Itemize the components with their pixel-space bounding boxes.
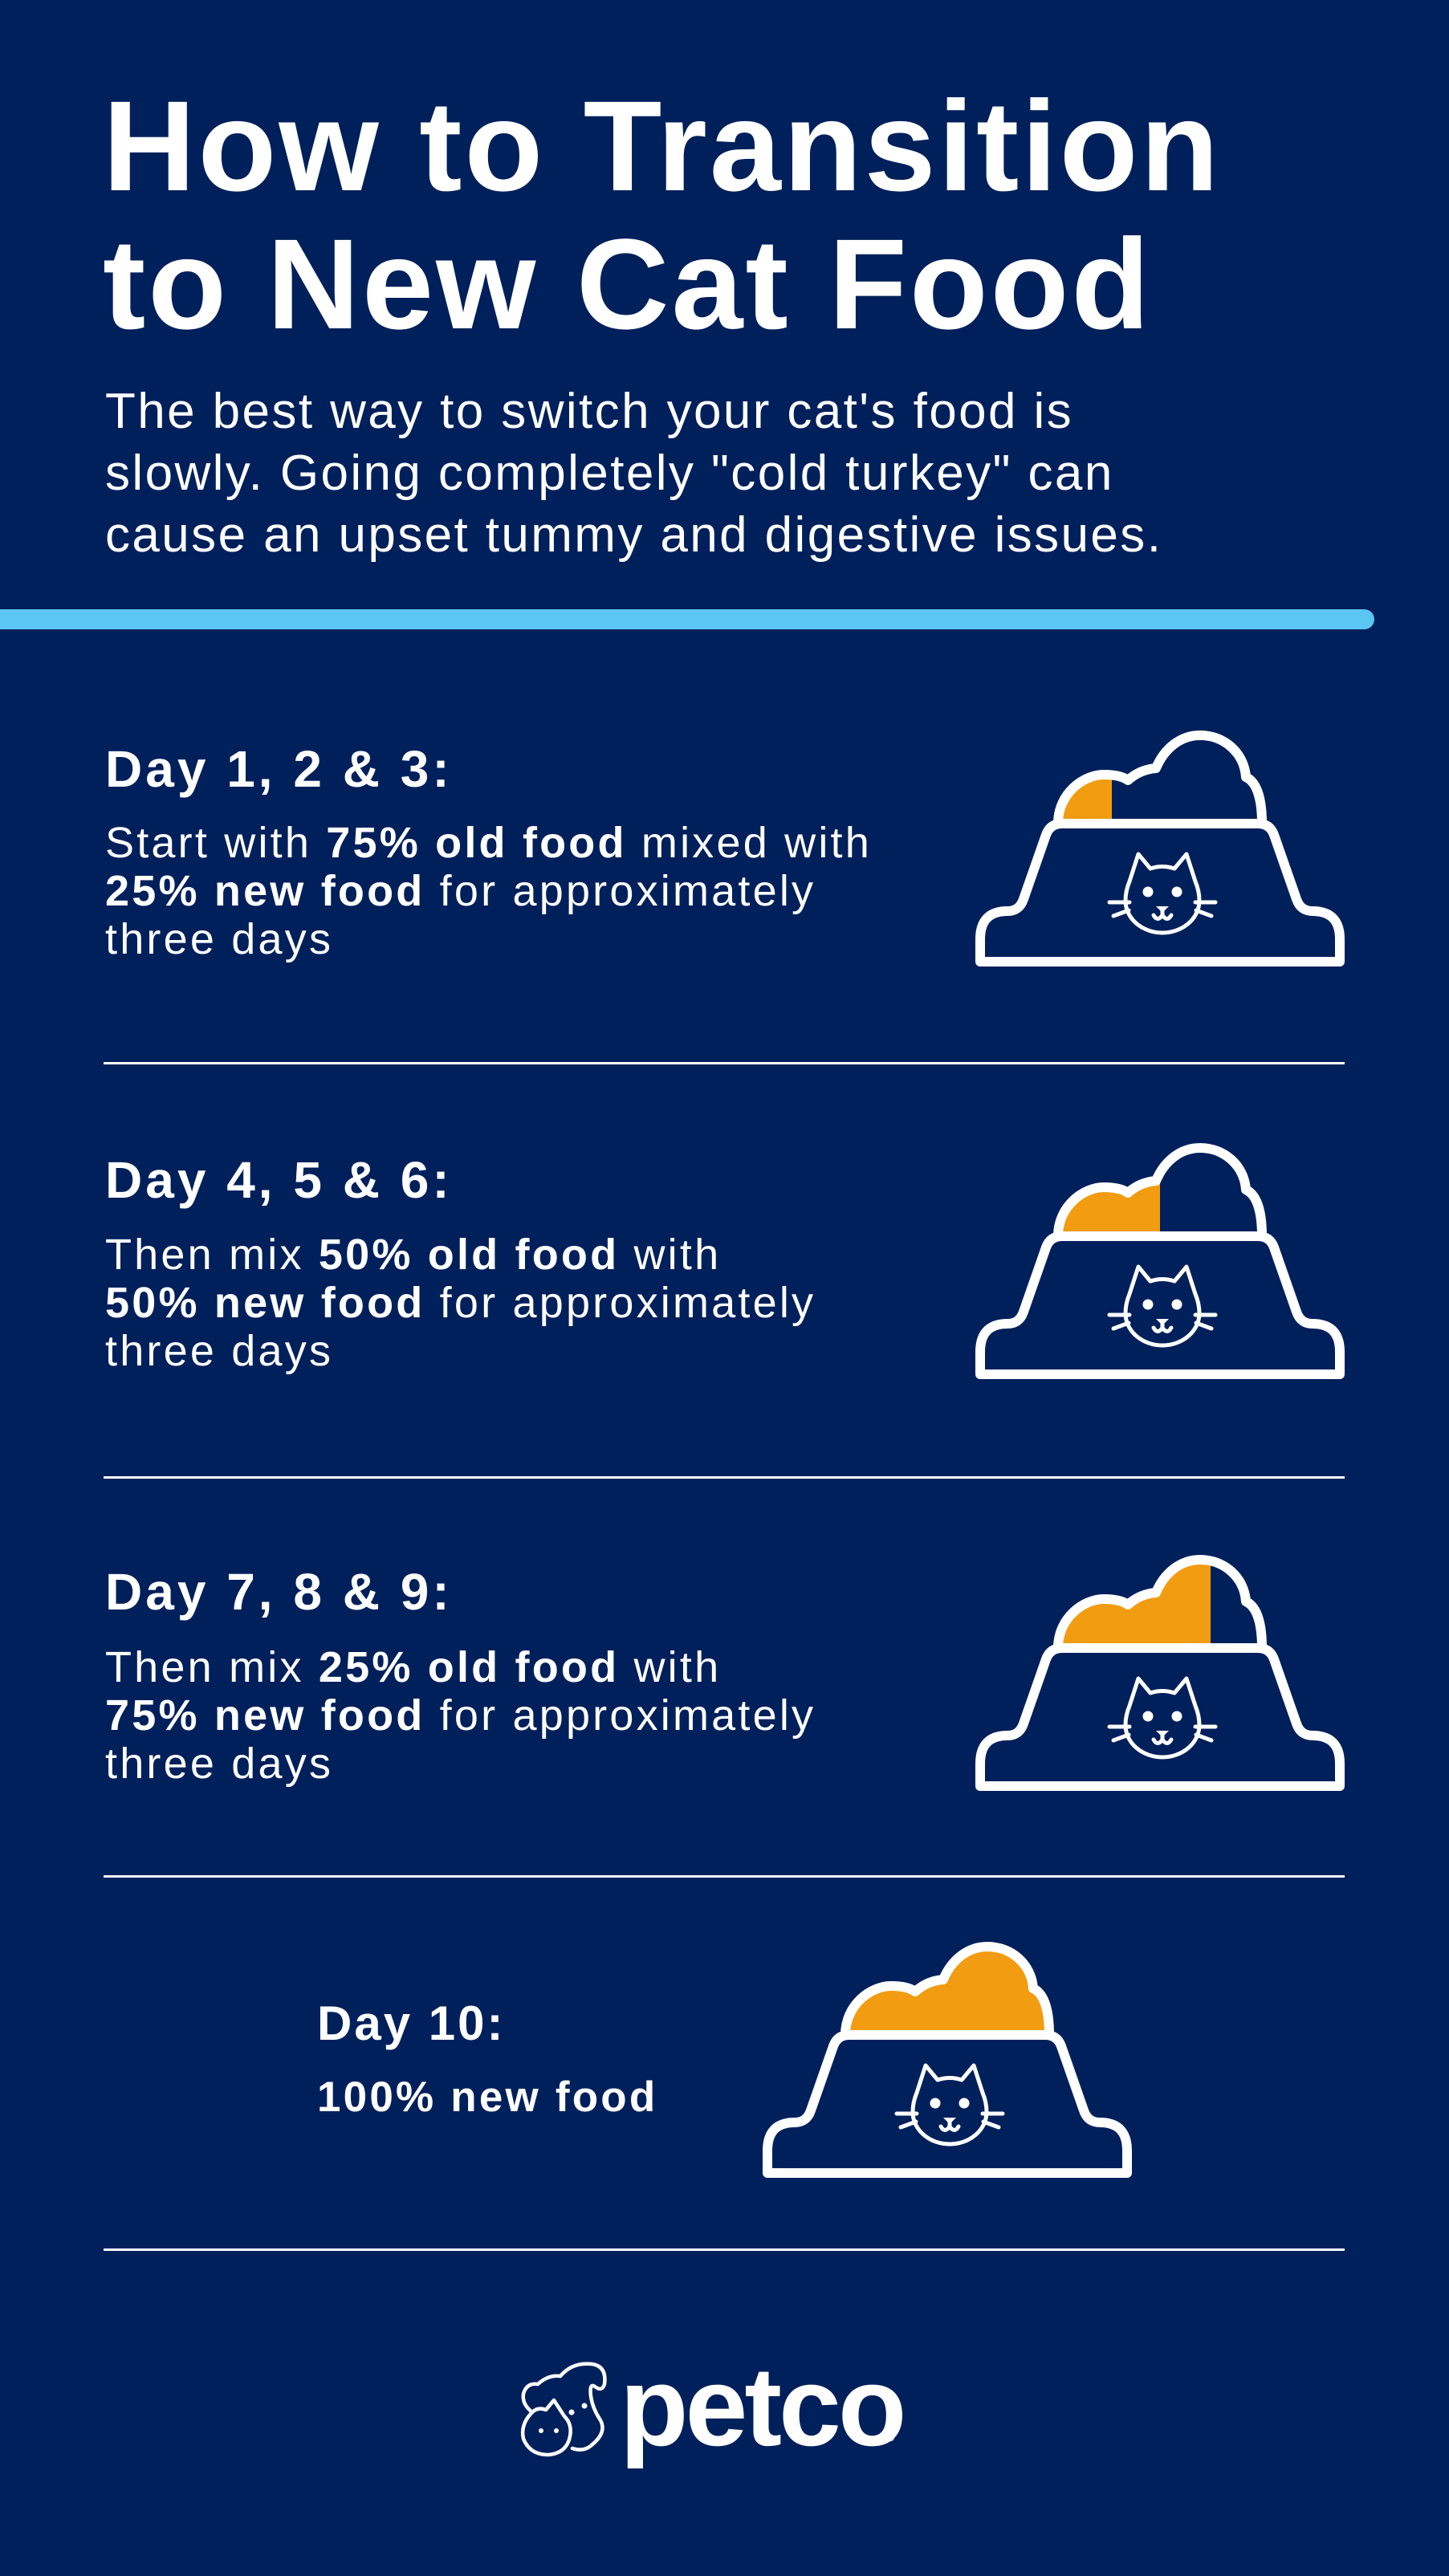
icon: cat and dog — [520, 2362, 607, 2456]
step 3 text: Then mix 25% old food with — [105, 1643, 721, 1691]
icon: bowl 50% — [975, 1143, 1345, 1379]
icon: bowl 75% — [975, 1555, 1345, 1791]
step 2 text: Then mix 50% old food with — [105, 1231, 721, 1279]
step 1 text: three days — [105, 915, 333, 963]
icon: bowl 25% — [975, 730, 1345, 967]
accent bar — [0, 609, 1374, 629]
subtitle — [105, 384, 1162, 563]
title: How to Transition — [103, 74, 1221, 218]
logo: ® — [886, 2431, 894, 2444]
step 1 text: 25% new food for approximately — [105, 867, 816, 915]
step 4 heading: Day 10: — [317, 1996, 505, 2050]
brand name: petco — [620, 2343, 903, 2469]
title — [103, 74, 1221, 356]
step 2 heading: Day 4, 5 & 6: — [105, 1151, 453, 1209]
step 2 text: 50% new food for approximately — [105, 1279, 816, 1327]
logo — [520, 2343, 903, 2469]
step 3 heading: Day 7, 8 & 9: — [105, 1563, 453, 1621]
step 1 text — [105, 819, 872, 963]
step 3 text: three days — [105, 1740, 333, 1788]
step 1 text: Start with 75% old food mixed with — [105, 819, 872, 867]
step 4 text: 100% new food — [317, 2073, 657, 2121]
subtitle: The best way to switch your cat's food is — [105, 384, 1073, 439]
step 2 text: three days — [105, 1327, 333, 1375]
subtitle: cause an upset tummy and digestive issues. — [105, 507, 1162, 563]
step 3 text — [105, 1643, 816, 1788]
title: to New Cat Food — [103, 212, 1152, 356]
step 1 heading: Day 1, 2 & 3: — [105, 740, 453, 798]
subtitle: slowly. Going completely "cold turkey" can — [105, 446, 1114, 501]
icon: bowl 100% — [763, 1942, 1132, 2178]
step 2 text — [105, 1231, 816, 1375]
step 3 text: 75% new food for approximately — [105, 1691, 816, 1740]
